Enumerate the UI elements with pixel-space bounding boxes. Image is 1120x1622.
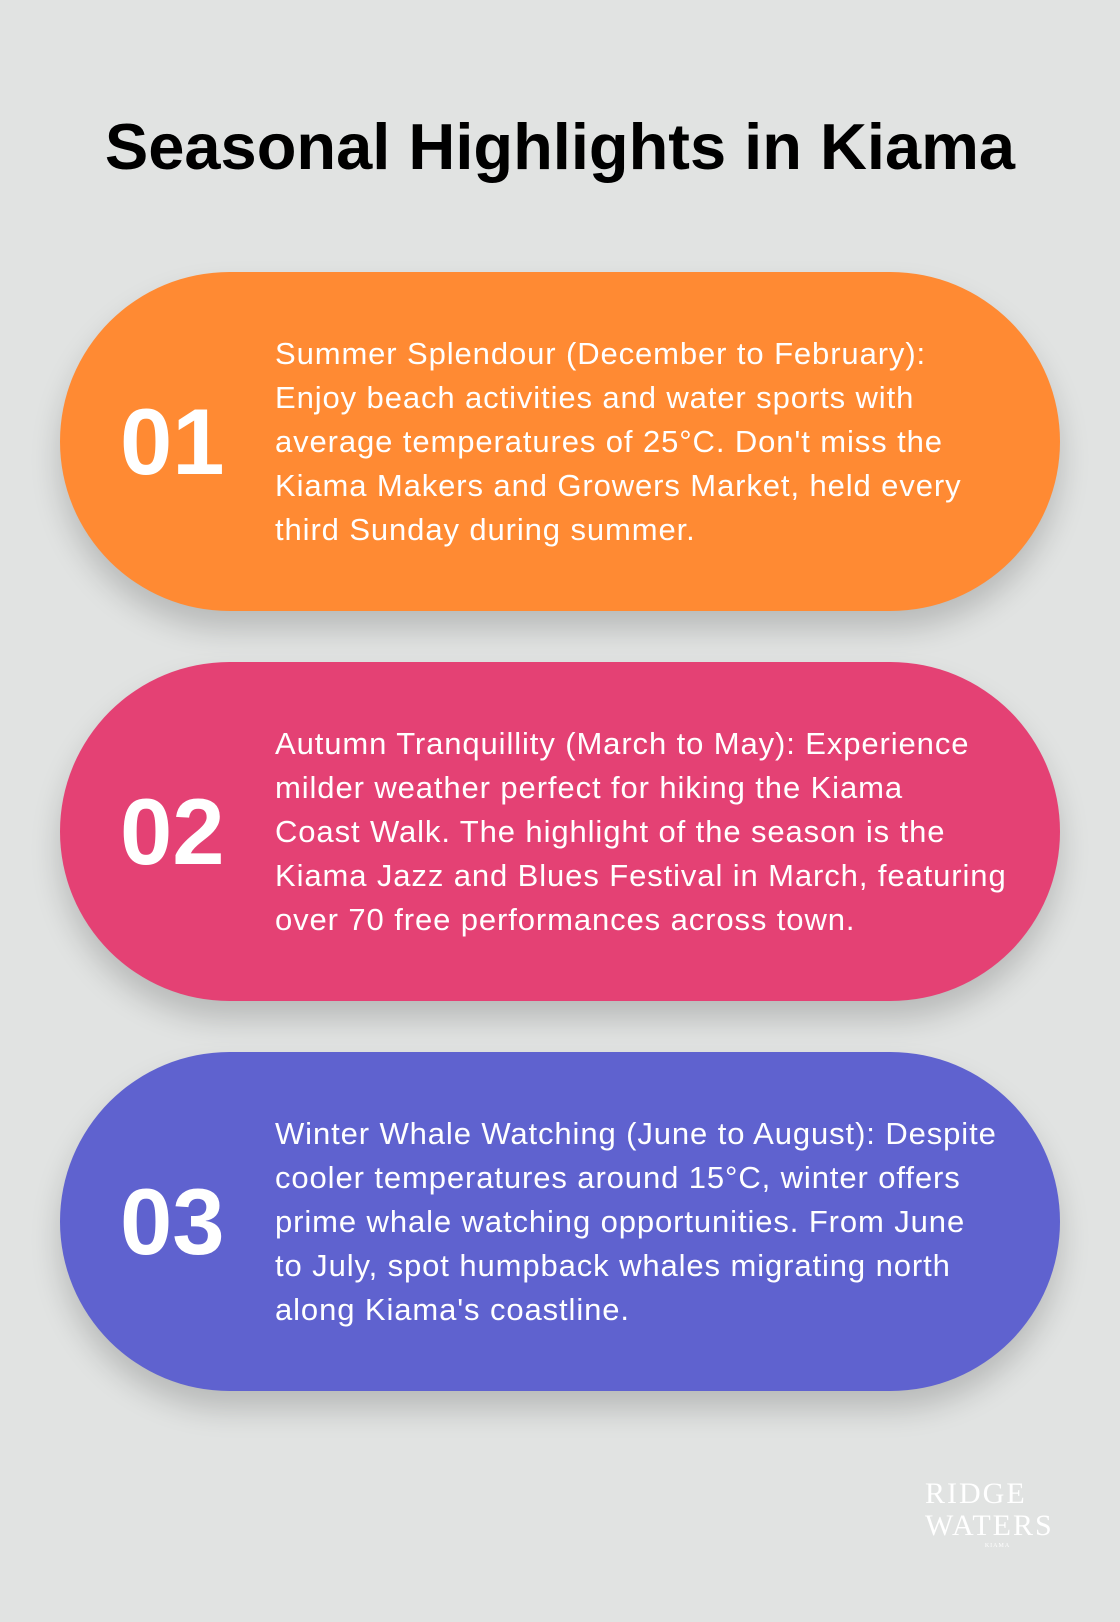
text: summer (275, 336, 962, 546)
logo: WATERS (925, 1509, 1054, 1542)
text: winter (275, 1116, 997, 1326)
text: summer: Summer Splendour (December to February): (275, 336, 926, 370)
text: winter: along Kiama's coastline. (275, 1292, 630, 1326)
text: winter: prime whale watching opportunities. From June (275, 1204, 965, 1238)
text: summer: average temperatures of 25°C. Don't miss the (275, 424, 943, 458)
text: autumn: Kiama Jazz and Blues Festival in March, featuring (275, 858, 1007, 892)
number 01: 01 (120, 389, 225, 494)
text: summer: Enjoy beach activities and water sports with (275, 380, 914, 414)
title: Seasonal Highlights in Kiama (105, 110, 1015, 183)
text: winter: to July, spot humpback whales migrating north (275, 1248, 951, 1282)
text: summer: third Sunday during summer. (275, 512, 696, 546)
logo: KIAMA (985, 1543, 1010, 1549)
text: winter: cooler temperatures around 15°C, winter offers (275, 1160, 961, 1194)
logo (925, 1477, 1054, 1549)
panel: autumn (60, 662, 1060, 1001)
text: autumn: milder weather perfect for hiking the Kiama (275, 770, 903, 804)
panel: winter (60, 1052, 1060, 1391)
text: summer: Kiama Makers and Growers Market, held every (275, 468, 962, 502)
logo: RIDGE (925, 1477, 1027, 1510)
number 03: 03 (120, 1169, 225, 1274)
text: autumn: Autumn Tranquillity (March to May): Experience (275, 726, 969, 760)
text: autumn: Coast Walk. The highlight of the season is the (275, 814, 945, 848)
text: autumn: over 70 free performances across town. (275, 902, 855, 936)
text: autumn (275, 726, 1007, 936)
text: winter: Winter Whale Watching (June to August): Despite (275, 1116, 997, 1150)
number 02: 02 (120, 779, 225, 884)
panel: summer (60, 272, 1060, 611)
